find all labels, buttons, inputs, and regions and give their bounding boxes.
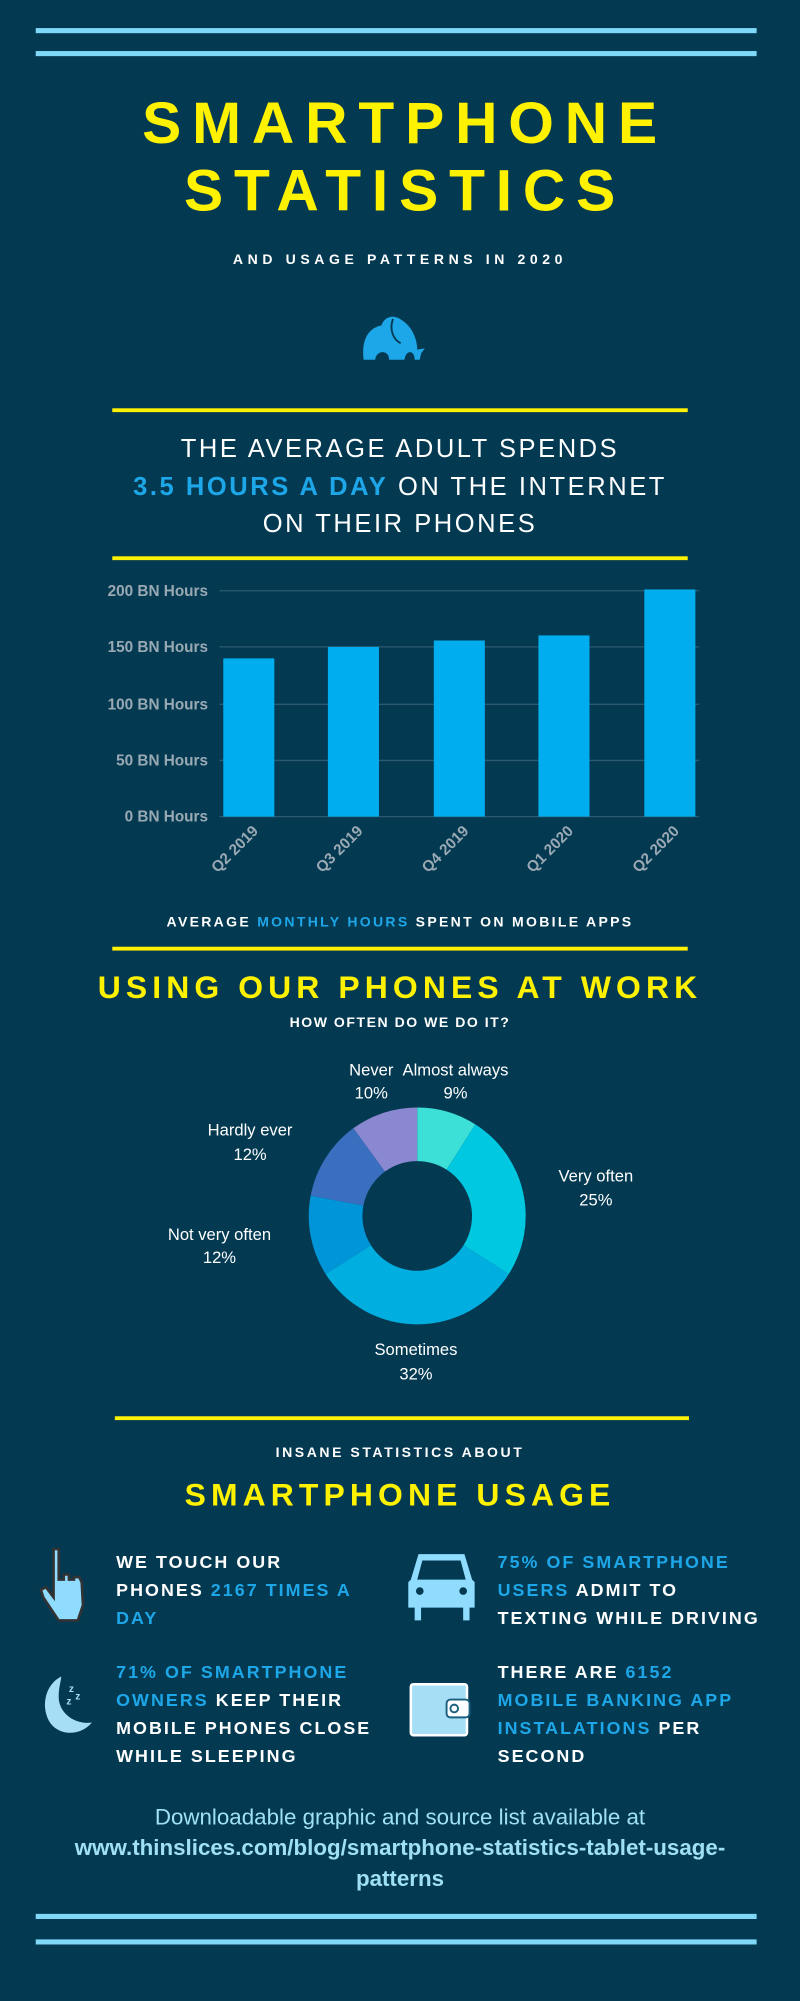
stat: texting while driving: TEXTING WHILE DRIVING: [498, 1608, 760, 1628]
donut chart: 12%: [233, 1145, 267, 1164]
stat: sleeping: 71% OF SMARTPHONE: [116, 1661, 348, 1682]
stat: banking app: THERE ARE 6152: [498, 1661, 673, 1682]
heading: smartphone usage: SMARTPHONE USAGE: [185, 1478, 615, 1513]
title: SMARTPHONE: [142, 89, 668, 156]
chart caption: AVERAGE MONTHLY HOURS SPENT ON MOBILE APPS: [167, 915, 633, 930]
footer text: www.thinslices.com/blog/smartphone-statistics-tablet-usage-: [75, 1835, 725, 1860]
donut chart: Never: [349, 1061, 394, 1080]
bar chart: 0 BN Hours: [125, 809, 208, 826]
stat: sleeping: WHILE SLEEPING: [116, 1745, 298, 1766]
stat: texting while driving: [498, 1552, 760, 1628]
donut chart: Sometimes: [374, 1340, 457, 1359]
donut chart: [168, 1061, 633, 1383]
bar chart: Q4 2019: [419, 823, 472, 876]
bar chart: 200 BN Hours: [108, 583, 208, 600]
stat: banking app: INSTALATIONS PER: [498, 1717, 701, 1738]
top lines: [36, 28, 757, 56]
subtitle: AND USAGE PATTERNS IN 2020: [233, 253, 567, 268]
stat: touch phones: WE TOUCH OUR: [116, 1552, 282, 1572]
headline: average adult: THE AVERAGE ADULT SPENDS: [181, 435, 619, 463]
headline: average adult: [133, 435, 667, 538]
footer text: Downloadable graphic and source list available at: [155, 1804, 645, 1830]
donut chart: 9%: [444, 1084, 468, 1103]
heading: phones at work: USING OUR PHONES AT WORK: [98, 970, 702, 1005]
bar chart: Q2 2019: [208, 823, 262, 876]
bar chart: 100 BN Hours: [108, 696, 208, 713]
icon: moon: z: [66, 1697, 71, 1708]
donut chart: 25%: [579, 1191, 613, 1210]
icon: elephant logo: [363, 316, 425, 360]
icon: moon: [44, 1676, 92, 1733]
stat: sleeping: OWNERS KEEP THEIR: [116, 1689, 343, 1710]
donut chart: Almost always: [403, 1061, 508, 1080]
stat: banking app: MOBILE BANKING APP: [498, 1689, 733, 1710]
stat: texting while driving: USERS ADMIT TO: [498, 1580, 678, 1600]
bar chart: [108, 583, 700, 876]
donut chart: 10%: [355, 1084, 388, 1103]
stat: sleeping: [116, 1661, 371, 1766]
icon: moon: z: [69, 1684, 74, 1695]
bottom lines: [36, 1914, 757, 1944]
donut chart: Hardly ever: [208, 1121, 293, 1140]
footer text: patterns: [356, 1865, 444, 1891]
headline: average adult: 3.5 HOURS A DAY ON THE INTERNET: [133, 473, 667, 501]
bar chart: 50 BN Hours: [116, 753, 208, 770]
donut chart: Not very often: [168, 1225, 271, 1244]
icon: moon: z: [75, 1692, 80, 1703]
bar chart: 150 BN Hours: [108, 639, 208, 656]
headline: average adult: ON THEIR PHONES: [263, 510, 537, 538]
stat: banking app: SECOND: [498, 1745, 586, 1766]
stat: touch phones: PHONES 2167 TIMES A: [116, 1580, 352, 1600]
bar chart: Q2 2020: [629, 823, 683, 876]
donut chart: 32%: [399, 1364, 433, 1383]
footer text: [74, 1804, 725, 1891]
heading: insane statistics: INSANE STATISTICS ABOUT: [276, 1446, 524, 1461]
donut chart: Very often: [559, 1167, 633, 1186]
bar chart: Q3 2019: [313, 823, 366, 876]
subheading: HOW OFTEN DO WE DO IT?: [290, 1016, 510, 1031]
icon: wallet: [410, 1683, 470, 1736]
stat: touch phones: [116, 1552, 352, 1628]
stat: sleeping: MOBILE PHONES CLOSE: [116, 1717, 371, 1738]
icon: car: [408, 1554, 475, 1620]
title: STATISTICS: [184, 157, 626, 223]
stat: touch phones: DAY: [116, 1608, 158, 1628]
donut chart: 12%: [203, 1248, 236, 1267]
yellow divider: [112, 408, 688, 412]
icon: hand: [39, 1548, 84, 1622]
stat: texting while driving: 75% OF SMARTPHONE: [498, 1552, 730, 1572]
title: [142, 89, 668, 223]
bar chart: Q1 2020: [523, 823, 577, 876]
stat: banking app: [498, 1661, 733, 1766]
